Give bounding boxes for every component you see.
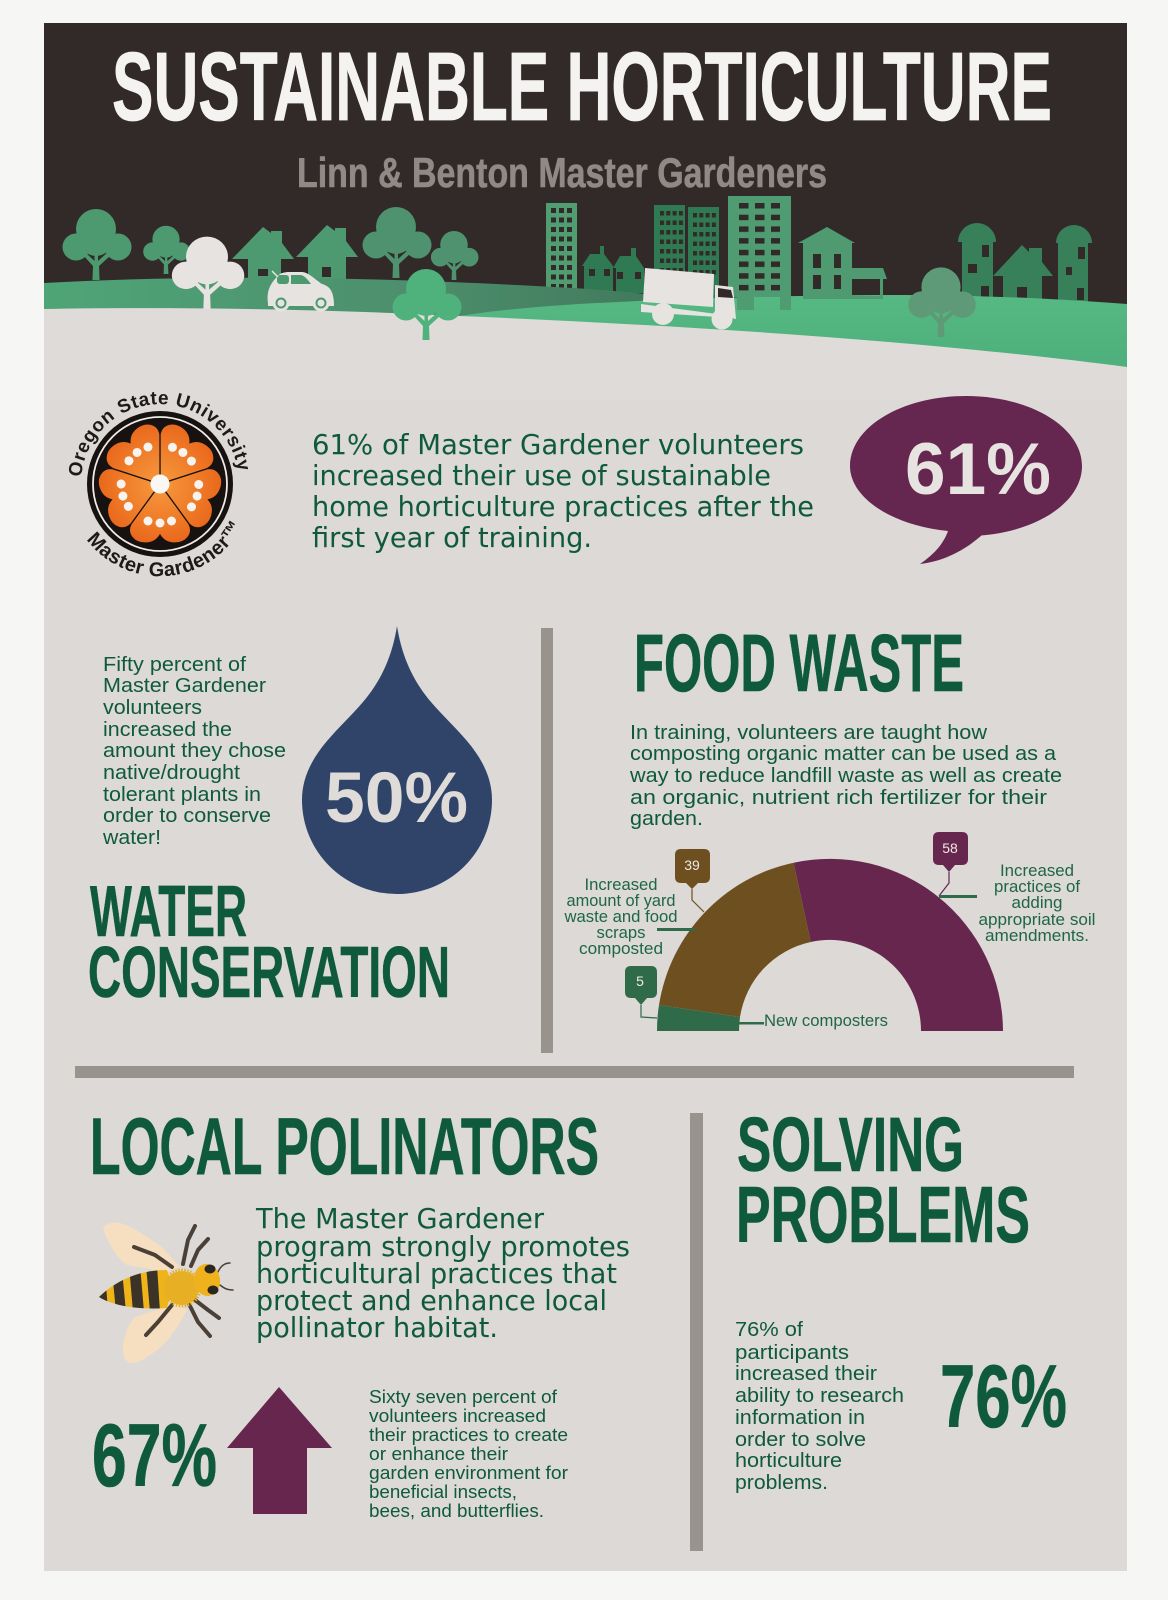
food waste paragraph: garden. — [630, 807, 703, 830]
front tree — [392, 269, 462, 340]
61 percent statement: home horticulture practices after the — [312, 491, 814, 523]
white tree — [172, 237, 244, 309]
front hill — [460, 295, 1127, 375]
food waste paragraph: In training, volunteers are taught how — [630, 721, 987, 744]
76 percent text: problems. — [735, 1471, 828, 1494]
label: soil amendments: Increased — [1000, 862, 1074, 880]
stat 67%: 67% — [92, 1405, 217, 1505]
logo ring — [87, 411, 233, 557]
wings — [103, 1223, 180, 1272]
water conservation text — [102, 653, 286, 849]
big house with garage — [798, 227, 887, 299]
water conservation text: tolerant plants in — [103, 783, 261, 806]
abdomen — [99, 1270, 172, 1309]
back hill — [44, 278, 700, 320]
speech bubble 61%: 61% — [905, 429, 1051, 510]
water conservation text: Fifty percent of — [103, 653, 246, 676]
label: soil amendments: amendments. — [985, 927, 1089, 945]
water drop 50%: 50% — [325, 759, 468, 838]
heading: local polinators: LOCAL POLINATORS — [90, 1102, 599, 1192]
label: soil amendments — [978, 862, 1096, 945]
badge 58 — [933, 832, 977, 898]
head — [192, 1262, 222, 1298]
food waste paragraph: an organic, nutrient rich fertilizer for their — [630, 786, 1047, 809]
legs and antennae — [134, 1226, 233, 1336]
61 percent statement: first year of training. — [312, 522, 592, 554]
food waste paragraph: way to reduce landfill waste as well as create — [629, 764, 1062, 787]
slice 39 — [659, 863, 811, 1017]
heading: solving problems: SOLVING — [737, 1102, 964, 1188]
car — [268, 271, 334, 312]
truck — [641, 268, 736, 330]
water conservation text: volunteers — [103, 696, 202, 719]
row houses — [582, 246, 644, 293]
76 percent text: horticulture — [735, 1449, 842, 1472]
label: soil amendments: appropriate soil — [978, 911, 1096, 929]
flower centre — [150, 474, 170, 494]
water conservation text: native/drought — [103, 761, 240, 784]
badge 5 — [625, 966, 657, 1018]
tall tower — [728, 196, 791, 310]
76 percent text — [735, 1318, 904, 1494]
67 percent text: garden environment for — [369, 1462, 568, 1483]
slice 58 — [794, 859, 1003, 1031]
stat 76%: 76% — [940, 1346, 1067, 1446]
pollinator paragraph: protect and enhance local — [256, 1285, 607, 1317]
icon: bee — [95, 1223, 233, 1363]
61 percent statement — [312, 429, 814, 554]
pollinator paragraph — [255, 1203, 630, 1344]
61 percent statement: increased their use of sustainable — [312, 460, 771, 492]
label: yard waste: Increased — [584, 876, 658, 894]
pollinator paragraph: pollinator habitat. — [256, 1312, 498, 1344]
heading: water conservation — [88, 872, 450, 1013]
water conservation text: increased the — [103, 718, 232, 741]
header banner — [44, 23, 1127, 400]
silos and farmhouse — [958, 223, 1092, 302]
tower block left — [546, 203, 577, 293]
rear trees — [62, 207, 478, 280]
badge 5: 5 — [636, 973, 644, 989]
slice 5 — [657, 1005, 740, 1031]
76 percent text: 76% of — [735, 1318, 803, 1341]
badge 39: 39 — [684, 857, 700, 873]
logo arc text top: Oregon State University — [68, 392, 248, 476]
label: yard waste: composted — [579, 940, 663, 958]
67 percent text: volunteers increased — [369, 1405, 546, 1426]
61 percent statement: 61% of Master Gardener volunteers — [312, 429, 804, 461]
pollinator paragraph: program strongly promotes — [256, 1231, 630, 1263]
badge 39 — [657, 849, 710, 931]
food waste paragraph — [629, 721, 1062, 830]
eyes — [204, 1264, 216, 1274]
label: yard waste: waste and food — [563, 908, 678, 926]
67 percent text — [369, 1386, 568, 1521]
heading: solving problems — [736, 1102, 1030, 1259]
76 percent text: order to solve — [735, 1428, 866, 1451]
dark header background — [44, 23, 1127, 368]
water conservation text: order to conserve — [103, 804, 271, 827]
67 percent text: bees, and butterflies. — [369, 1500, 544, 1521]
stripes — [99, 1270, 160, 1308]
water conservation text: water! — [102, 826, 161, 849]
label: new composters: New composters — [764, 1012, 888, 1030]
speech bubble 61% — [850, 396, 1082, 564]
logo: Oregon State University Master Gardener — [68, 392, 248, 576]
logo arc text bottom: Master Gardener™ — [87, 520, 235, 576]
subtitle: Linn & Benton Master Gardeners — [297, 149, 827, 196]
label: soil amendments: adding — [1012, 894, 1062, 912]
76 percent text: increased their — [735, 1362, 877, 1385]
water conservation text: amount they chose — [103, 739, 286, 762]
pollinator paragraph: The Master Gardener — [255, 1203, 545, 1235]
label: soil amendments: practices of — [994, 878, 1080, 896]
label: yard waste — [563, 876, 678, 958]
right tree — [908, 267, 976, 337]
thorax — [164, 1270, 200, 1306]
67 percent text: beneficial insects, — [369, 1481, 517, 1502]
left houses — [232, 225, 358, 290]
heading: water conservation: WATER — [90, 872, 247, 952]
label: yard waste: scraps — [596, 924, 646, 942]
pollinator paragraph: horticultural practices that — [256, 1258, 617, 1290]
grey foreground curve — [44, 308, 1127, 400]
twin towers — [654, 205, 719, 302]
heading: water conservation: CONSERVATION — [88, 933, 450, 1013]
label: yard waste: amount of yard — [566, 892, 676, 910]
petals — [94, 418, 226, 543]
76 percent text: participants — [735, 1341, 849, 1364]
67 percent text: their practices to create — [369, 1424, 568, 1445]
67 percent text: or enhance their — [369, 1443, 508, 1464]
badge 58: 58 — [942, 840, 958, 856]
semi-donut chart — [563, 832, 1096, 1031]
76 percent text: information in — [735, 1406, 865, 1429]
67 percent text: Sixty seven percent of — [369, 1386, 558, 1407]
icon: up arrow — [227, 1387, 332, 1514]
water conservation text: Master Gardener — [103, 674, 266, 697]
water drop 50% — [302, 626, 492, 894]
food waste paragraph: composting organic matter can be used as a — [630, 742, 1057, 765]
76 percent text: ability to research — [735, 1384, 904, 1407]
